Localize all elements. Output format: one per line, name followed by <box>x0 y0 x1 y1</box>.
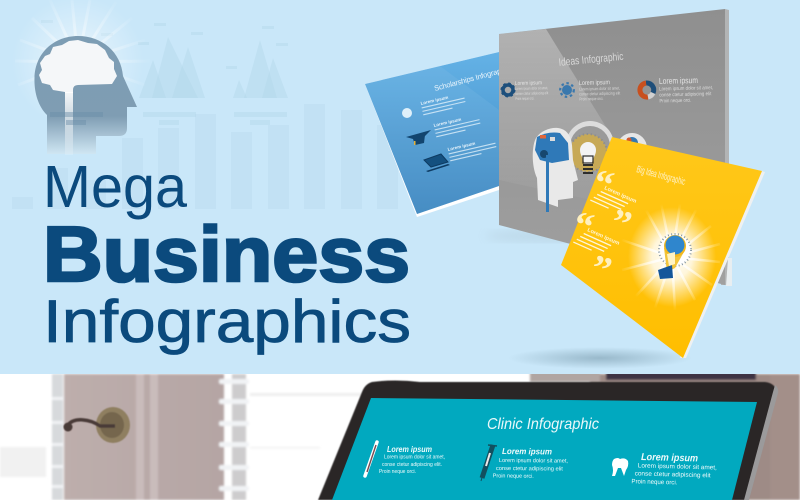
icon: tooth <box>612 458 628 476</box>
icon: quote marks: “ <box>589 161 618 207</box>
icon: dark gear <box>502 84 514 96</box>
illustration: sunburst <box>622 203 720 310</box>
text block: column 2: Lorem ipsum dolor sit amet, <box>579 85 620 91</box>
brain <box>39 40 117 93</box>
text block: column 1: Lorem ipsum dolor sit amet, <box>515 86 548 91</box>
text block: column 1 <box>379 445 445 475</box>
white window background <box>0 374 800 500</box>
text block: column 1: Lorem ipsum dolor sit amet, <box>384 454 445 460</box>
text block: column 2: Lorem ipsum dolor sit amet, <box>499 458 568 465</box>
icon: quote marks: ” <box>607 201 636 247</box>
text block: item 1 <box>420 96 466 116</box>
panel: tablet photo <box>0 372 800 500</box>
icon: syringe <box>481 445 497 481</box>
text block: item 2 <box>434 118 480 138</box>
icon: door handle <box>64 407 130 443</box>
icon: globe <box>402 108 412 118</box>
heading: Ideas Infographic: Ideas Infographic <box>558 51 624 69</box>
text block: column 1: Proin neque orci. <box>379 469 416 475</box>
white slide edge <box>680 170 765 358</box>
heading: Scholarships Infographic: Scholarships Infographic <box>433 64 511 93</box>
icon: graduation cap <box>406 130 431 145</box>
label bars over head <box>50 112 103 125</box>
text block: column 2: Lorem ipsum <box>502 446 552 456</box>
text block: column 1: Proin neque orci. <box>515 96 534 101</box>
text block: column 3: Proin neque orci. <box>659 98 692 104</box>
faded bar chart backdrop <box>12 104 398 209</box>
photo: door and blinds <box>52 374 249 500</box>
text block: column 1 <box>515 80 549 101</box>
glass reflection <box>499 29 660 215</box>
slide side edge <box>721 9 729 285</box>
icon: blue gear <box>560 83 574 97</box>
text block: column 2 <box>493 448 568 479</box>
illustration: brain head <box>533 128 578 212</box>
text block: column 3 <box>659 75 714 104</box>
shadow under yellow slide <box>508 347 692 369</box>
text block: column 1: Lorem ipsum <box>515 80 542 87</box>
icon: lightbulb <box>658 234 691 279</box>
text block: item 3: Lorem ipsum <box>447 141 476 152</box>
text block: item 2: Lorem ipsum <box>433 117 462 128</box>
text block: column 2: Proin neque orci. <box>579 96 603 101</box>
sheen <box>365 66 499 214</box>
panel: gray ideas slide <box>499 9 729 285</box>
text block: column 3: Lorem ipsum dolor sit amet, <box>638 462 717 471</box>
icon: thermometer <box>365 442 377 476</box>
heading: Clinic Infographic: Clinic Infographic <box>487 416 599 433</box>
icon: laptop <box>424 154 450 172</box>
text block: column 2: Proin neque orci. <box>493 473 534 480</box>
background <box>0 0 800 374</box>
text block: column 3: Proin neque orci. <box>631 478 678 486</box>
faded triangle chart backdrop <box>41 20 288 125</box>
title <box>43 154 411 355</box>
tablet body <box>318 380 777 500</box>
text block: upper quote: Lorem ipsum <box>603 185 637 205</box>
text block: column 2: conse ctetur adipiscing elit <box>496 466 563 473</box>
head silhouette <box>34 36 137 154</box>
text block: lower quote <box>573 224 620 260</box>
soft shadow under gray slide <box>485 230 635 242</box>
slide stand <box>726 258 732 286</box>
illustration: second head behind yellow slide <box>617 133 647 163</box>
icon: head with brain and rays <box>12 0 150 155</box>
text block: column 1: conse ctetur adipiscing elit. <box>382 462 442 468</box>
icon: donut chart <box>640 83 654 97</box>
illustration: lightbulb halo <box>566 121 614 174</box>
brain stem <box>65 92 73 155</box>
text block: column 2 <box>579 79 621 101</box>
heading: Big Idea Infographic: Big Idea Infographic <box>635 164 686 188</box>
text block: column 3: conse ctetur adipiscing elit <box>635 470 711 479</box>
icon: quote marks <box>569 161 636 293</box>
panel: blue scholarships slide <box>365 52 511 217</box>
tablet screen <box>332 398 757 500</box>
panel: yellow big idea slide <box>561 137 765 358</box>
text block: column 3: Lorem ipsum dolor sit amet, <box>659 85 713 92</box>
text block: column 1: conse ctetur adipiscing elit <box>515 91 549 96</box>
blurred window details <box>0 393 365 477</box>
photo: right side background <box>530 372 800 500</box>
text block: column 3 <box>632 453 716 486</box>
text block: column 3: Lorem ipsum <box>659 75 698 86</box>
text block: column 3: conse ctetur adipiscing elit <box>659 91 712 98</box>
text block: column 3: Lorem ipsum <box>641 452 698 464</box>
text block: upper quote <box>590 182 637 218</box>
text block: column 2: Lorem ipsum <box>579 79 610 87</box>
rays <box>15 0 150 85</box>
text block: column 1: Lorem ipsum <box>387 445 432 454</box>
text block: lower quote: Lorem ipsum <box>586 227 620 247</box>
text block: item 1: Lorem ipsum <box>420 95 449 106</box>
title line: Infographics: Infographics <box>43 288 411 355</box>
icon: quote marks: ” <box>587 247 616 293</box>
glow behind head <box>12 0 144 128</box>
text block: column 2: conse ctetur adipiscing elit <box>579 90 621 96</box>
title line: Mega: Mega <box>43 154 187 220</box>
text block: item 3 <box>448 142 496 162</box>
icon: quote marks: “ <box>569 203 598 249</box>
title line: Business: Business <box>43 210 410 298</box>
